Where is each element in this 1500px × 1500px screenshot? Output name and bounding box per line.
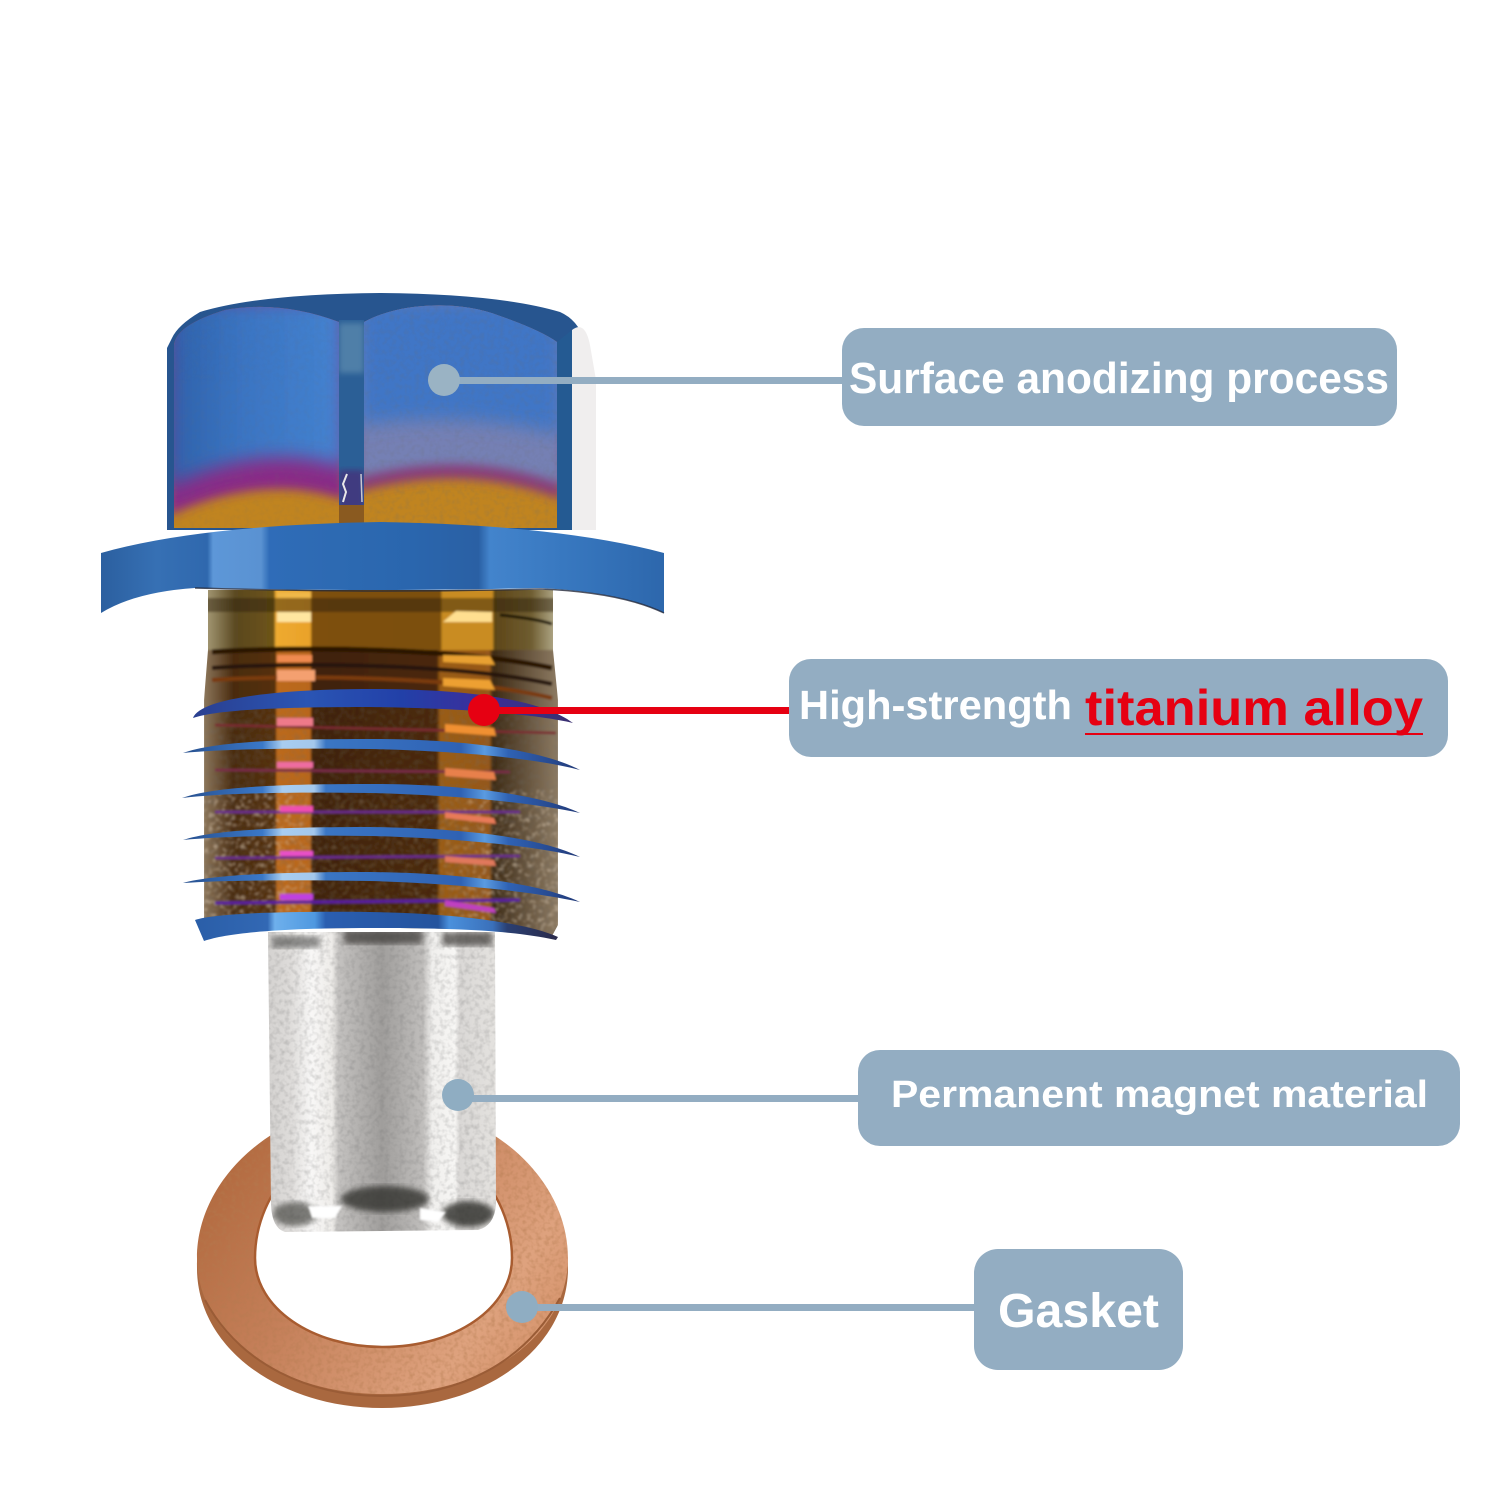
label box: Gasket (998, 1285, 1159, 1338)
leader line and dot (442, 1079, 860, 1111)
label box (789, 659, 1448, 757)
leader line and dot (468, 694, 791, 726)
label box: High-strength (799, 682, 1072, 728)
permanent magnet cylinder (266, 928, 498, 1234)
product photo: titanium drain plug with gasket (101, 293, 664, 1408)
hex head (167, 293, 596, 530)
callout: surface anodizing (428, 328, 1397, 426)
label box (974, 1249, 1183, 1370)
collar ridges (205, 598, 556, 612)
leader line and dot (506, 1291, 976, 1323)
callout: permanent magnet (442, 1050, 1460, 1146)
label box: titanium alloy (1085, 680, 1423, 736)
leader line and dot (428, 364, 844, 396)
label box: Permanent magnet material (891, 1074, 1428, 1116)
label box (858, 1050, 1460, 1146)
callout: titanium alloy (468, 659, 1448, 757)
callout: gasket (506, 1249, 1183, 1370)
threaded shaft (182, 588, 580, 941)
label box: Surface anodizing process (849, 354, 1389, 403)
flange (101, 522, 664, 613)
label box (842, 328, 1397, 426)
thread ridges (193, 689, 573, 723)
copper gasket washer (197, 1103, 568, 1408)
